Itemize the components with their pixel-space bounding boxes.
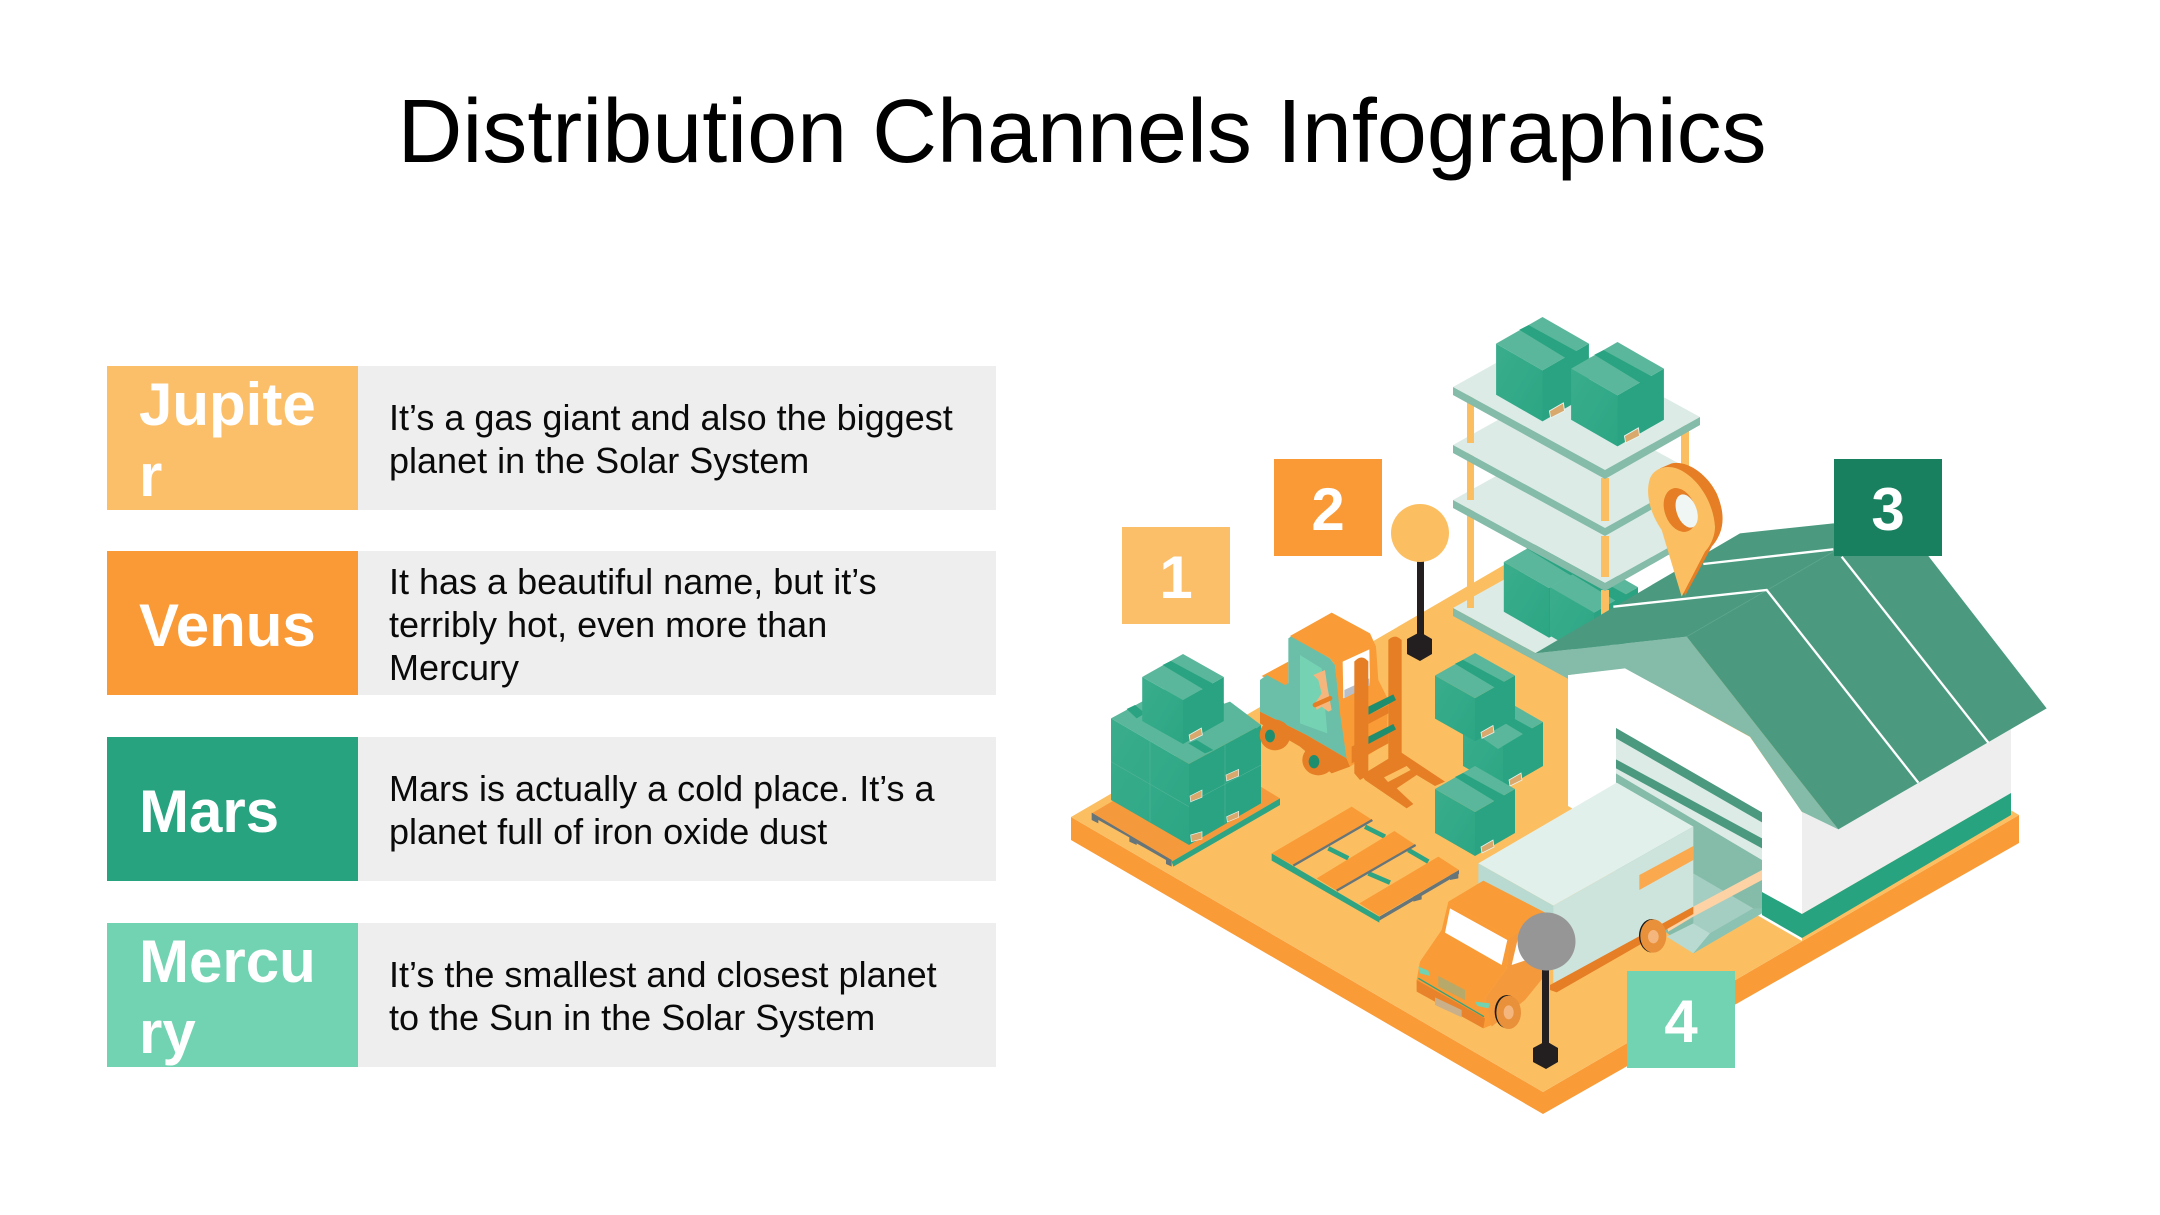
title: Distribution Channels Infographics <box>398 82 1767 182</box>
marker: grey pin <box>1518 912 1576 1069</box>
text: Mars description <box>389 768 936 852</box>
heading: Mars: Mars <box>139 778 279 845</box>
warehouse walls <box>1568 668 2011 941</box>
number badge 3: 3 <box>1871 476 1905 543</box>
number badge 2 <box>1274 459 1382 556</box>
boxes on top shelf <box>1496 317 1664 446</box>
heading: Venus: Venus <box>139 592 316 659</box>
heading: Mars <box>107 737 358 881</box>
number badge 3 <box>1834 459 1942 556</box>
marker: yellow pin <box>1391 504 1449 661</box>
text: Mercury description: to the Sun in the Solar System <box>389 997 875 1038</box>
text: Jupiter description <box>389 397 953 481</box>
number badge 1: 1 <box>1159 544 1193 611</box>
heading: Jupiter <box>107 366 358 510</box>
panel: Jupiter <box>107 366 996 510</box>
map pin <box>1648 463 1723 597</box>
text: Venus description: Mercury <box>389 647 519 688</box>
text: Mercury description <box>389 954 937 1038</box>
heading: Mercury <box>107 923 358 1067</box>
delivery truck <box>1417 783 1693 1029</box>
empty pallet <box>1272 807 1459 923</box>
panel: Mercury <box>107 923 996 1067</box>
number badge 4 <box>1627 971 1735 1068</box>
text: Jupiter description: It’s a gas giant and also the biggest <box>389 397 953 438</box>
heading: Mercury: Mercu <box>139 928 316 995</box>
panel: Mars <box>107 737 996 881</box>
text: Venus description: It has a beautiful name, but it’s <box>389 561 877 602</box>
text: Mercury description: It’s the smallest and closest planet <box>389 954 937 995</box>
text: Venus description <box>389 561 877 688</box>
text: Mars description: planet full of iron oxide dust <box>389 811 827 852</box>
heading: Venus <box>107 551 358 695</box>
platform <box>1071 540 2019 1114</box>
number badge 1 <box>1122 527 1230 624</box>
heading: Mercury: ry <box>139 999 196 1066</box>
heading: Jupiter: Jupite <box>139 371 316 438</box>
forklift <box>1260 613 1445 808</box>
storage shelf <box>1453 317 1700 699</box>
number badge 4: 4 <box>1664 988 1698 1055</box>
text: Mars description: Mars is actually a cold place. It’s a <box>389 768 936 809</box>
text: Venus description: terribly hot, even more than <box>389 604 827 645</box>
stacked boxes on pallet <box>1092 654 1280 867</box>
stacked boxes <box>1435 653 1543 856</box>
illustration: isometric warehouse <box>1071 317 2047 1114</box>
number badge 2: 2 <box>1311 476 1345 543</box>
roof <box>1535 523 2047 829</box>
loading door <box>1616 728 1762 953</box>
text: Jupiter description: planet in the Solar System <box>389 440 809 481</box>
heading: Jupiter: r <box>139 442 162 509</box>
panel: Venus <box>107 551 996 695</box>
